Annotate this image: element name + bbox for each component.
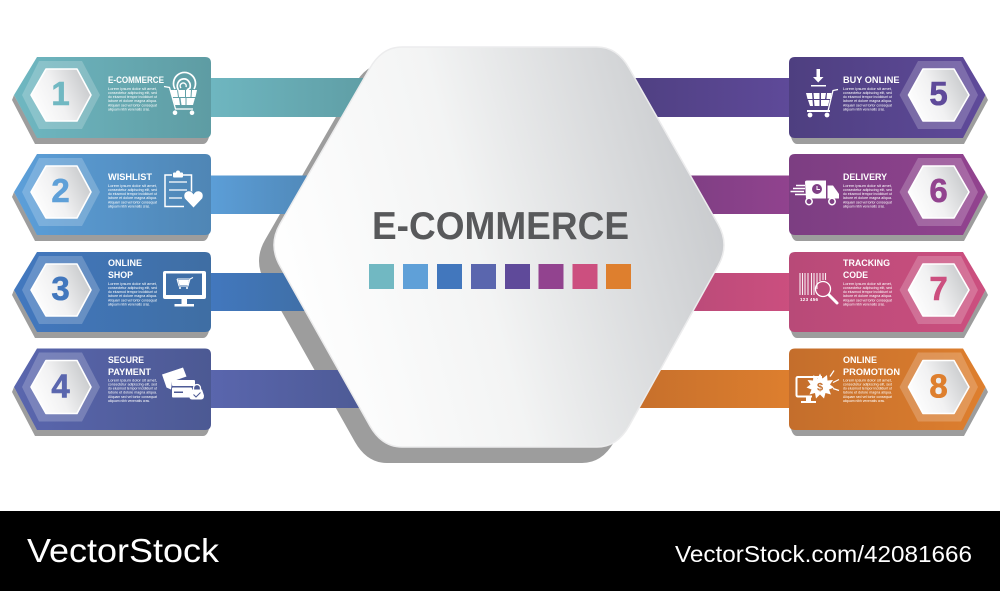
card body xyxy=(14,154,211,235)
number: 3 xyxy=(51,270,70,307)
outer hexagon xyxy=(900,352,978,422)
body text: do eiusmod tempor incididunt ut xyxy=(108,289,158,294)
title xyxy=(108,257,142,280)
card shadow xyxy=(791,290,988,338)
title: PROMOTION xyxy=(843,366,900,377)
number: 6 xyxy=(929,172,948,209)
body text xyxy=(843,378,893,403)
body text: Lorem ipsum dolor sit amet, xyxy=(843,86,892,91)
central hexagon shadow xyxy=(259,63,709,463)
card 8: online promotion xyxy=(789,348,988,436)
card body xyxy=(14,252,211,332)
inner hexagon xyxy=(908,166,969,218)
body text xyxy=(843,86,893,111)
connector bars xyxy=(205,78,795,408)
title xyxy=(108,354,151,377)
body text: consectetur adipiscing elit, sed xyxy=(108,90,157,95)
outer hexagon xyxy=(900,61,978,129)
outer hexagon xyxy=(22,256,100,324)
icon: clipboard with heart xyxy=(165,170,203,208)
body text: Aliquam sed vel tortor consequat xyxy=(843,102,893,107)
body text: do eiusmod tempor incididunt ut xyxy=(108,94,158,99)
body text xyxy=(108,86,158,111)
body text: Aliquam sed vel tortor consequat xyxy=(108,297,158,302)
inner hexagon xyxy=(31,264,91,316)
body text: Lorem ipsum dolor sit amet, xyxy=(108,281,157,286)
card shadow xyxy=(12,387,209,436)
body text: Lorem ipsum dolor sit amet, xyxy=(843,281,892,286)
card shadow xyxy=(791,95,988,144)
card body xyxy=(789,57,986,138)
body text: aliquam nibh venenatis cras. xyxy=(108,301,150,306)
body text: aliquam nibh venenatis cras. xyxy=(108,398,150,403)
title: PAYMENT xyxy=(108,366,151,377)
title xyxy=(843,354,900,377)
card 1: e-commerce xyxy=(12,57,211,144)
body text: Lorem ipsum dolor sit amet, xyxy=(843,183,892,188)
number: 5 xyxy=(929,75,948,112)
card body xyxy=(789,154,986,235)
body text: Lorem ipsum dolor sit amet, xyxy=(108,183,157,188)
inner hexagon xyxy=(908,69,969,121)
body text: consectetur adipiscing elit, sed xyxy=(108,187,157,192)
number: 8 xyxy=(929,368,948,404)
number: 4 xyxy=(51,368,70,404)
title: CODE xyxy=(843,269,868,280)
card shadow xyxy=(12,192,209,241)
outer hexagon xyxy=(900,256,978,324)
body text: aliquam nibh venenatis cras. xyxy=(843,203,885,208)
body text: do eiusmod tempor incididunt ut xyxy=(843,94,893,99)
icon: cart with at sign xyxy=(164,72,197,115)
body text: labore et dolore magna aliqua. xyxy=(108,98,157,103)
body text: consectetur adipiscing elit, sed xyxy=(843,285,892,290)
body text: consectetur adipiscing elit, sed xyxy=(843,382,892,386)
body text: do eiusmod tempor incididunt ut xyxy=(843,289,893,294)
icon: barcode with magnifier: 123 456 xyxy=(800,297,818,302)
body text: labore et dolore magna aliqua. xyxy=(843,293,892,298)
card shadow xyxy=(12,290,209,338)
body text: Aliquam sed vel tortor consequat xyxy=(843,394,893,399)
card body xyxy=(14,57,211,138)
body text: Lorem ipsum dolor sit amet, xyxy=(108,378,157,382)
outer hexagon xyxy=(22,61,100,129)
title xyxy=(843,257,890,280)
footer logo: VectorStock xyxy=(27,533,219,570)
body text: consectetur adipiscing elit, sed xyxy=(843,90,892,95)
card shadow xyxy=(12,95,209,144)
card shadow xyxy=(791,387,988,436)
body text: labore et dolore magna aliqua. xyxy=(108,195,157,200)
body text: Lorem ipsum dolor sit amet, xyxy=(108,86,157,91)
title: DELIVERY xyxy=(843,171,888,182)
body text: Aliquam sed vel tortor consequat xyxy=(843,297,893,302)
card 7: tracking code xyxy=(789,252,988,338)
body text xyxy=(108,378,158,403)
body text: labore et dolore magna aliqua. xyxy=(108,293,157,298)
body text: Aliquam sed vel tortor consequat xyxy=(108,199,158,204)
body text: do eiusmod tempor incididunt ut xyxy=(108,386,158,391)
body text xyxy=(843,281,893,306)
body text xyxy=(108,183,158,208)
card 3: online shop xyxy=(12,252,211,338)
icon: credit cards with lock xyxy=(162,368,204,400)
footer band xyxy=(0,511,1000,591)
central hexagon xyxy=(274,47,724,447)
icon: delivery truck xyxy=(790,180,839,205)
title: WISHLIST xyxy=(108,171,152,182)
body text: Lorem ipsum dolor sit amet, xyxy=(843,378,892,382)
number: 7 xyxy=(929,270,948,307)
body text: Aliquam sed vel tortor consequat xyxy=(108,394,158,399)
colour swatches xyxy=(369,264,631,289)
body text: labore et dolore magna aliqua. xyxy=(843,98,892,103)
heading: E-COMMERCE xyxy=(372,205,629,248)
body text: do eiusmod tempor incididunt ut xyxy=(843,191,893,196)
card 4: secure payment xyxy=(12,348,211,436)
card shadow xyxy=(791,192,988,241)
title: E-COMMERCE xyxy=(108,74,164,85)
card 6: delivery xyxy=(789,154,988,241)
outer hexagon xyxy=(22,352,100,422)
body text: aliquam nibh venenatis cras. xyxy=(108,106,150,111)
card 5: buy online xyxy=(789,57,988,144)
footer url: VectorStock.com/42081666 xyxy=(675,541,972,567)
inner hexagon xyxy=(908,264,969,316)
icon: monitor with cart xyxy=(163,271,206,306)
title: ONLINE xyxy=(843,354,877,365)
icon: monitor with dollar burst: $ xyxy=(817,382,823,394)
card 2: wishlist xyxy=(12,154,211,241)
body text: labore et dolore magna aliqua. xyxy=(843,195,892,200)
outer hexagon xyxy=(900,158,978,226)
number: 1 xyxy=(51,75,70,112)
title: SHOP xyxy=(108,269,133,280)
card body xyxy=(789,252,986,332)
body text: aliquam nibh venenatis cras. xyxy=(108,203,150,208)
body text: Aliquam sed vel tortor consequat xyxy=(843,199,893,204)
body text: aliquam nibh venenatis cras. xyxy=(843,398,885,403)
body text: labore et dolore magna aliqua. xyxy=(108,390,157,395)
body text: labore et dolore magna aliqua. xyxy=(843,390,892,395)
body text: consectetur adipiscing elit, sed xyxy=(843,187,892,192)
inner hexagon xyxy=(908,360,969,414)
outer hexagon xyxy=(22,158,100,226)
number: 2 xyxy=(51,172,70,209)
inner hexagon xyxy=(31,360,91,414)
title: ONLINE xyxy=(108,257,142,268)
body text: consectetur adipiscing elit, sed xyxy=(108,382,157,386)
body text: do eiusmod tempor incididunt ut xyxy=(108,191,158,196)
card body xyxy=(14,348,211,430)
body text xyxy=(843,183,893,208)
body text xyxy=(108,281,158,306)
inner hexagon xyxy=(31,166,91,218)
body text: Aliquam sed vel tortor consequat xyxy=(108,102,158,107)
title: SECURE xyxy=(108,354,144,365)
body text: do eiusmod tempor incididunt ut xyxy=(843,386,893,391)
body text: aliquam nibh venenatis cras. xyxy=(843,301,885,306)
icon: cart with download arrow xyxy=(806,69,838,117)
title: TRACKING xyxy=(843,257,890,268)
title: BUY ONLINE xyxy=(843,74,900,85)
body text: aliquam nibh venenatis cras. xyxy=(843,106,885,111)
body text: consectetur adipiscing elit, sed xyxy=(108,285,157,290)
inner hexagon xyxy=(31,69,91,121)
icon: barcode with magnifier xyxy=(800,273,837,303)
card body xyxy=(789,348,986,430)
icon: monitor with dollar burst xyxy=(796,370,839,403)
